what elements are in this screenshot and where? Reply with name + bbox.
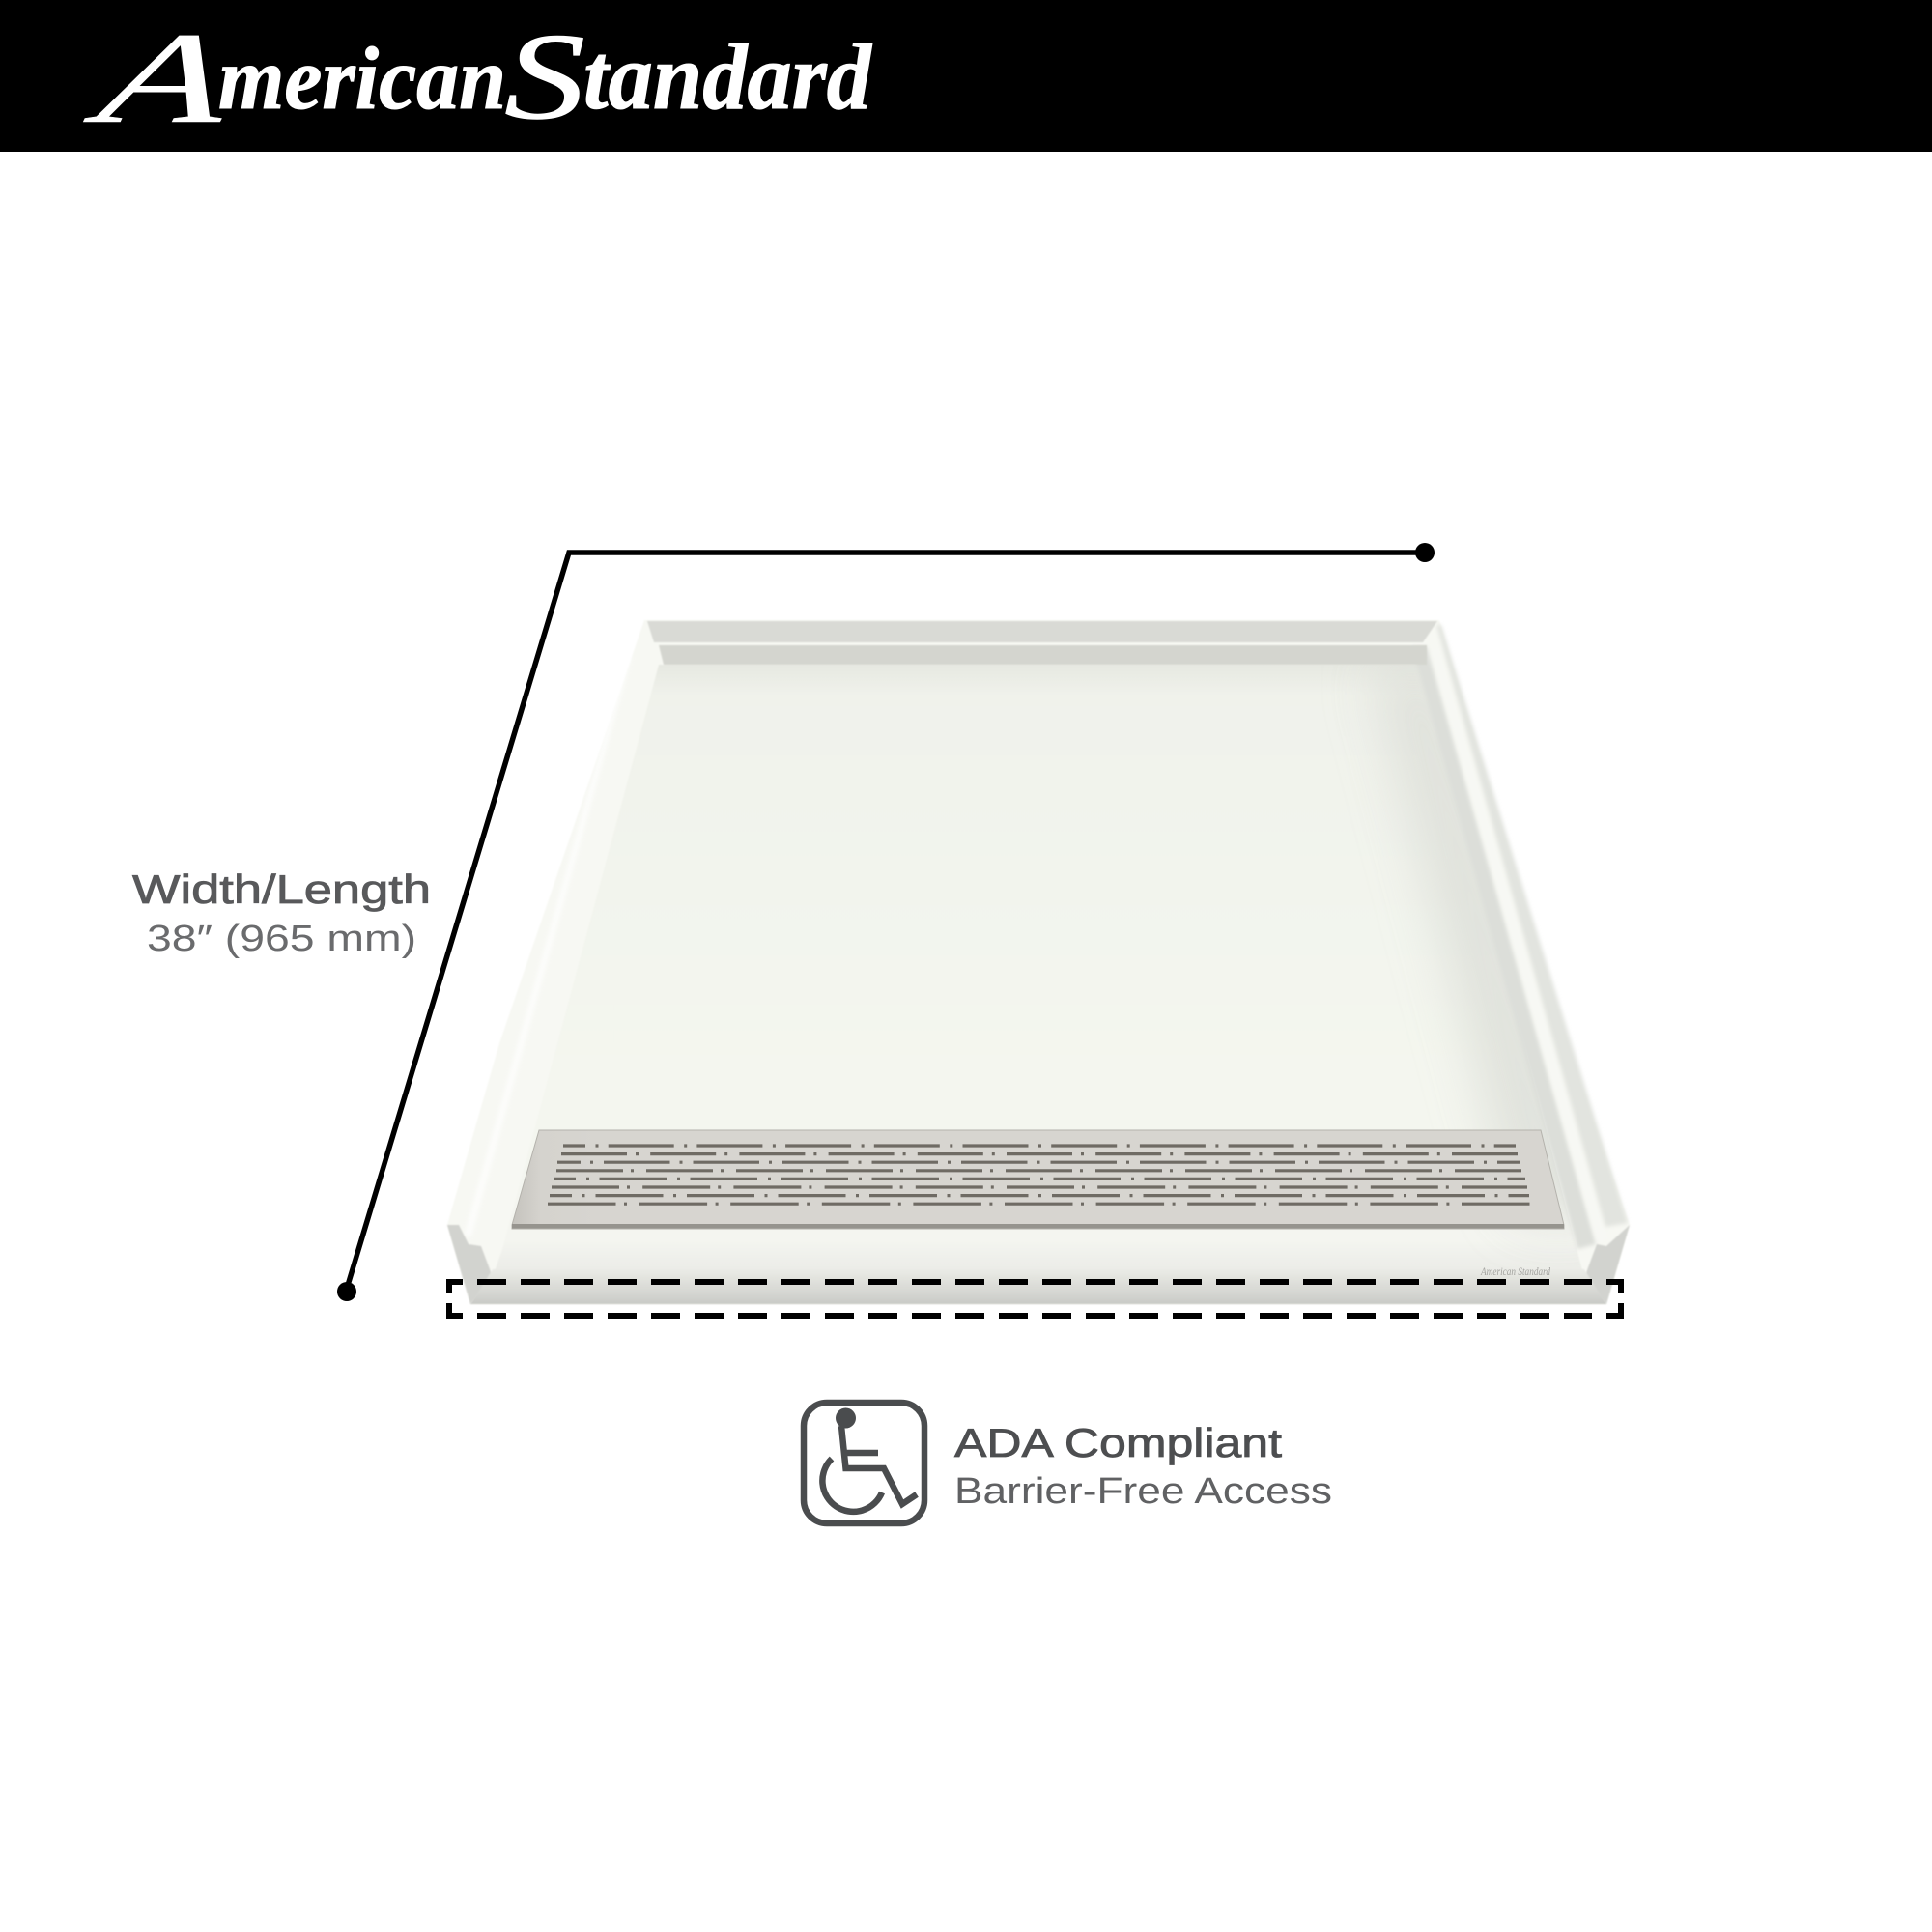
icon: wheelchair accessibility: [804, 1403, 924, 1523]
brand logo: A: [77, 7, 242, 151]
front lip face: [470, 1269, 1606, 1304]
brand logo: S: [504, 8, 585, 145]
tray outer rim: [447, 620, 1630, 1304]
right ledge highlight: [1432, 649, 1607, 1242]
back wall upper face: [647, 621, 1437, 642]
right post front face: [1584, 1225, 1630, 1304]
tiny engraved brand mark: American Standard: [1480, 1264, 1551, 1278]
left ledge highlight: [464, 657, 632, 1236]
brand logo: [77, 7, 873, 151]
right inner wall band: [1412, 647, 1596, 1249]
shower base tray: [447, 620, 1630, 1304]
dimension label: 38″ (965 mm): [147, 919, 416, 959]
grate bottom edge: [512, 1224, 1564, 1229]
right outer wall band: [1436, 625, 1628, 1227]
ADA compliance text: ADA Compliant: [954, 1420, 1282, 1465]
brand logo: merican: [218, 29, 506, 128]
brand logo: tandard: [583, 25, 873, 129]
dimension label: [132, 867, 431, 959]
header band: [0, 0, 1932, 152]
back wall lower face: [659, 645, 1427, 665]
linear drain grate: [512, 1130, 1564, 1229]
infographic canvas: [0, 0, 1932, 1526]
grate plate: [512, 1130, 1564, 1229]
left post front face: [447, 1225, 493, 1304]
dimension label: Width/Length: [132, 867, 431, 912]
ADA compliance text: Barrier-Free Access: [954, 1471, 1332, 1512]
ADA compliance text: [954, 1420, 1332, 1512]
grate slots: [548, 1146, 1531, 1204]
basin floor: [493, 665, 1584, 1278]
dimension line with end dots: [337, 543, 1435, 1301]
dashed threshold highlight: [449, 1282, 1621, 1316]
right floor shading: [1379, 680, 1567, 1223]
